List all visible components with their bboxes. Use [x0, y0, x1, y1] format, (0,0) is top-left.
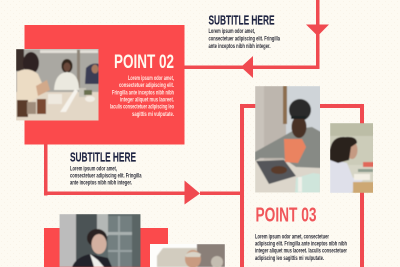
text: point 02 body: consectetuer adipiscing elit. — [119, 83, 174, 89]
panel: bottom red block — [44, 214, 168, 267]
text: point 02 body: sagittis mi vulputate. — [132, 112, 174, 118]
arrow: pointing down — [306, 24, 329, 36]
panel: point 02 — [16, 25, 184, 144]
text: point 03 body — [255, 234, 347, 262]
text block: subtitle one: Lorem ipsum odor amet, — [208, 29, 255, 35]
text block: subtitle two: Lorem ipsum odor amet, — [70, 166, 117, 172]
text block: subtitle two — [70, 150, 142, 186]
heading: point 02: POINT 02 — [114, 52, 174, 73]
text: point 03 body: integer aliquet mus laoreet. Iaculis consectetuer — [255, 248, 347, 254]
text: point 02 body — [110, 76, 174, 118]
photo: woman writing — [330, 123, 373, 193]
arrow: pointing right — [184, 180, 200, 204]
photo: team meeting — [16, 49, 98, 120]
text block: subtitle two: SUBTITLE HERE — [70, 150, 136, 164]
text block: subtitle one — [208, 12, 280, 50]
text: point 02 body: Iaculis consectetuer adipiscing leo — [110, 104, 174, 110]
text block: subtitle two: ante inceptos nibh nibh integer. — [70, 180, 132, 186]
text block: subtitle one: ante inceptos nibh nibh integer. — [208, 44, 271, 50]
text: point 03 body: adipiscing leo sagittis mi vulputate. — [255, 256, 324, 262]
text block: subtitle one: consectetuer adipiscing elit. Fringilla — [208, 36, 280, 42]
connector: top path with arrows — [184, 0, 329, 78]
panel: point 03 — [200, 86, 374, 267]
text: point 03 body: Lorem ipsum odor amet, consectetuer — [255, 234, 329, 240]
text: point 03 body: adipiscing elit. Fringilla ante inceptos nibh nibh — [255, 242, 347, 248]
text block: subtitle two: consectetuer adipiscing elit. Fringilla — [70, 174, 142, 180]
text block: subtitle one: SUBTITLE HERE — [208, 12, 275, 28]
photo: man with glasses — [150, 244, 225, 267]
photo: woman at laptop — [255, 86, 320, 192]
connector: middle path with arrow — [44, 144, 200, 204]
text: point 02 body: Fringilla ante inceptos nibh nibh — [112, 90, 174, 96]
photo: woman with glasses — [60, 214, 140, 267]
arrow: pointing left — [241, 56, 253, 78]
text: point 02 body: Lorem ipsum odor amet, — [128, 76, 174, 82]
heading: point 03: POINT 03 — [256, 204, 316, 226]
text: point 02 body: integer aliquet mus laoreet. — [120, 98, 174, 104]
